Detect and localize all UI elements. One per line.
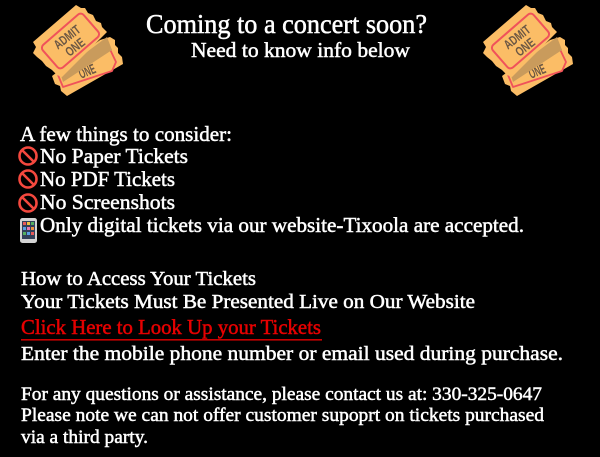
heading: how to access: How to Access Your Tickets — [21, 268, 256, 290]
link: look up tickets: Click Here to Look Up your Tickets — [21, 315, 321, 339]
icon: left tickets: ONE — [76, 60, 98, 82]
icon: right tickets: ADMIT — [522, 46, 552, 70]
subtitle: Need to know info below — [191, 38, 411, 62]
title: Coming to a concert soon? — [146, 9, 427, 39]
text: enter phone or email: Enter the mobile phone number or email used during purchase. — [21, 343, 563, 365]
list item: no screenshots: No Screenshots — [40, 190, 175, 214]
list item: no pdf tickets: No PDF Tickets — [40, 167, 175, 191]
list item: digital tickets only: Only digital tickets via our website-Tixoola are accepted. — [40, 213, 524, 237]
icon: left tickets — [33, 5, 123, 96]
icon: right tickets: ONE — [512, 34, 538, 59]
icon: right tickets: ONE — [526, 60, 548, 82]
icon: right tickets: ADMIT — [501, 22, 533, 52]
icon: no entry 1 — [20, 148, 36, 164]
text: contact: For any questions or assistance, please contact us at: 330-325-0647 — [21, 384, 542, 405]
icon: left tickets: ADMIT — [72, 46, 102, 70]
text: third party note end: via a third party. — [21, 427, 148, 448]
text: third party note: Please note we can not offer customer supoprt on tickets purchased — [21, 405, 545, 426]
icon: no entry 2 — [20, 170, 36, 188]
text: presented live: Your Tickets Must Be Presented Live on Our Website — [21, 291, 475, 313]
icon: no entry 3 — [20, 194, 36, 212]
icon: left tickets: ADMIT — [51, 22, 83, 52]
icon: left tickets: ONE — [62, 34, 88, 59]
icon: right tickets — [483, 5, 573, 96]
heading: things to consider: A few things to consider: — [20, 122, 232, 146]
icon: mobile phone — [20, 218, 37, 243]
list item: no paper tickets: No Paper Tickets — [40, 144, 188, 168]
